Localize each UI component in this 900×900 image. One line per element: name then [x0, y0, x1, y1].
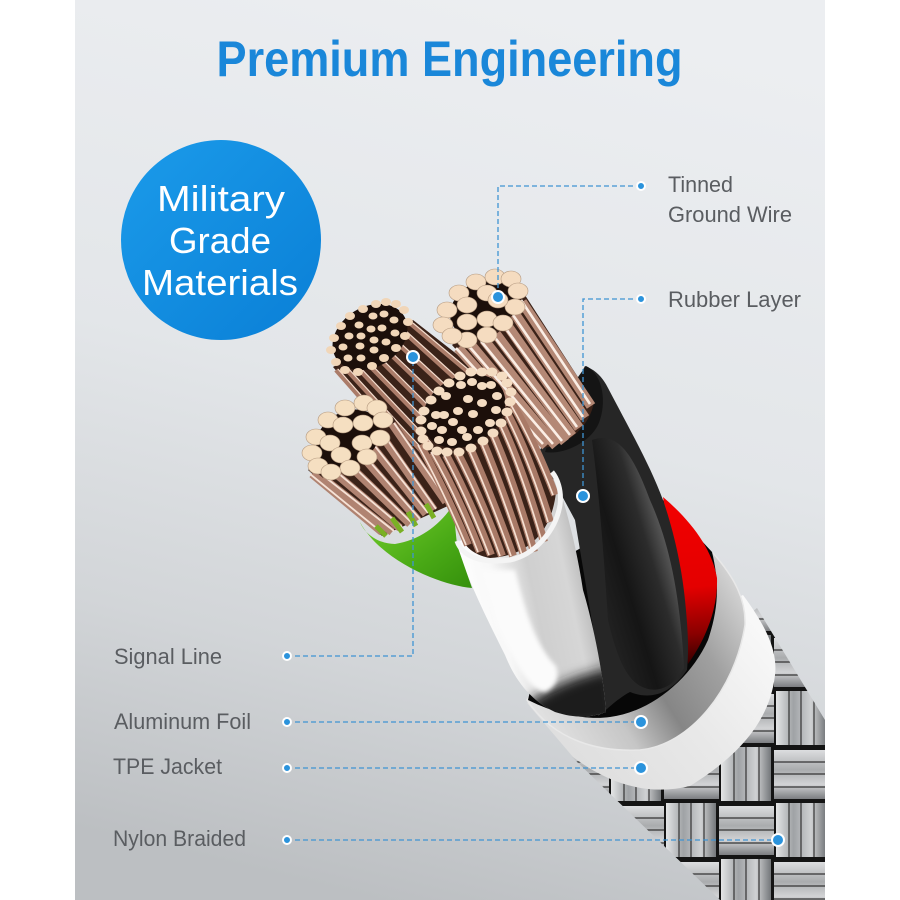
callout: Tinned Ground Wire: Ground Wire: [668, 202, 792, 227]
callout: Nylon Braided: Nylon Braided: [113, 826, 246, 851]
end face: tinned ground wire bundle: [433, 268, 528, 348]
black rubber wire: [540, 366, 688, 716]
callout: Signal Line: Signal Line: [114, 644, 222, 669]
badge: Military Grade Materials: Materials: [142, 262, 298, 303]
badge: Military Grade Materials: Grade: [169, 220, 271, 261]
red wire: [663, 497, 717, 664]
callout: Tinned Ground Wire: Tinned: [668, 172, 733, 197]
badge: Military Grade Materials: Military: [157, 178, 285, 219]
rubber collar: [545, 366, 603, 453]
copper strands: signal line: [333, 320, 494, 490]
TPE jacket: [527, 595, 775, 790]
white wire: [458, 479, 606, 717]
green wire: [360, 505, 472, 588]
copper strands: centre wire: [418, 403, 556, 558]
callout: Aluminum Foil: Aluminum Foil: [114, 709, 251, 734]
callout: TPE Jacket: TPE Jacket: [113, 754, 222, 779]
end face: signal line bundle lower: [302, 395, 393, 480]
callout: TPE Jacket: [113, 754, 647, 779]
callout: Rubber Layer: [577, 287, 801, 502]
end face: signal line bundle top: [320, 290, 420, 384]
white wire highlight: [480, 570, 557, 692]
callout: Signal Line: [114, 351, 419, 669]
white wire bottom shadow: [527, 661, 606, 717]
white wire rim: [457, 472, 560, 561]
cable illustration: [302, 268, 825, 900]
callout: Tinned Ground Wire: [492, 172, 792, 303]
end face: centre wire bundle: [409, 359, 519, 463]
copper strands: tinned ground wire: [452, 292, 594, 448]
black wire glossy lobe: [592, 438, 684, 690]
cable opening: [528, 500, 717, 718]
title: Premium Engineering: [216, 31, 682, 87]
badge: Military Grade Materials: [121, 140, 321, 340]
nylon braided sleeve: [572, 608, 825, 900]
callout: Rubber Layer: Rubber Layer: [668, 287, 801, 312]
aluminum foil ring: [527, 553, 745, 750]
callout: Aluminum Foil: [114, 709, 647, 734]
copper strands: signal line (lower left): [308, 417, 450, 536]
callout: Nylon Braided: [113, 826, 784, 851]
